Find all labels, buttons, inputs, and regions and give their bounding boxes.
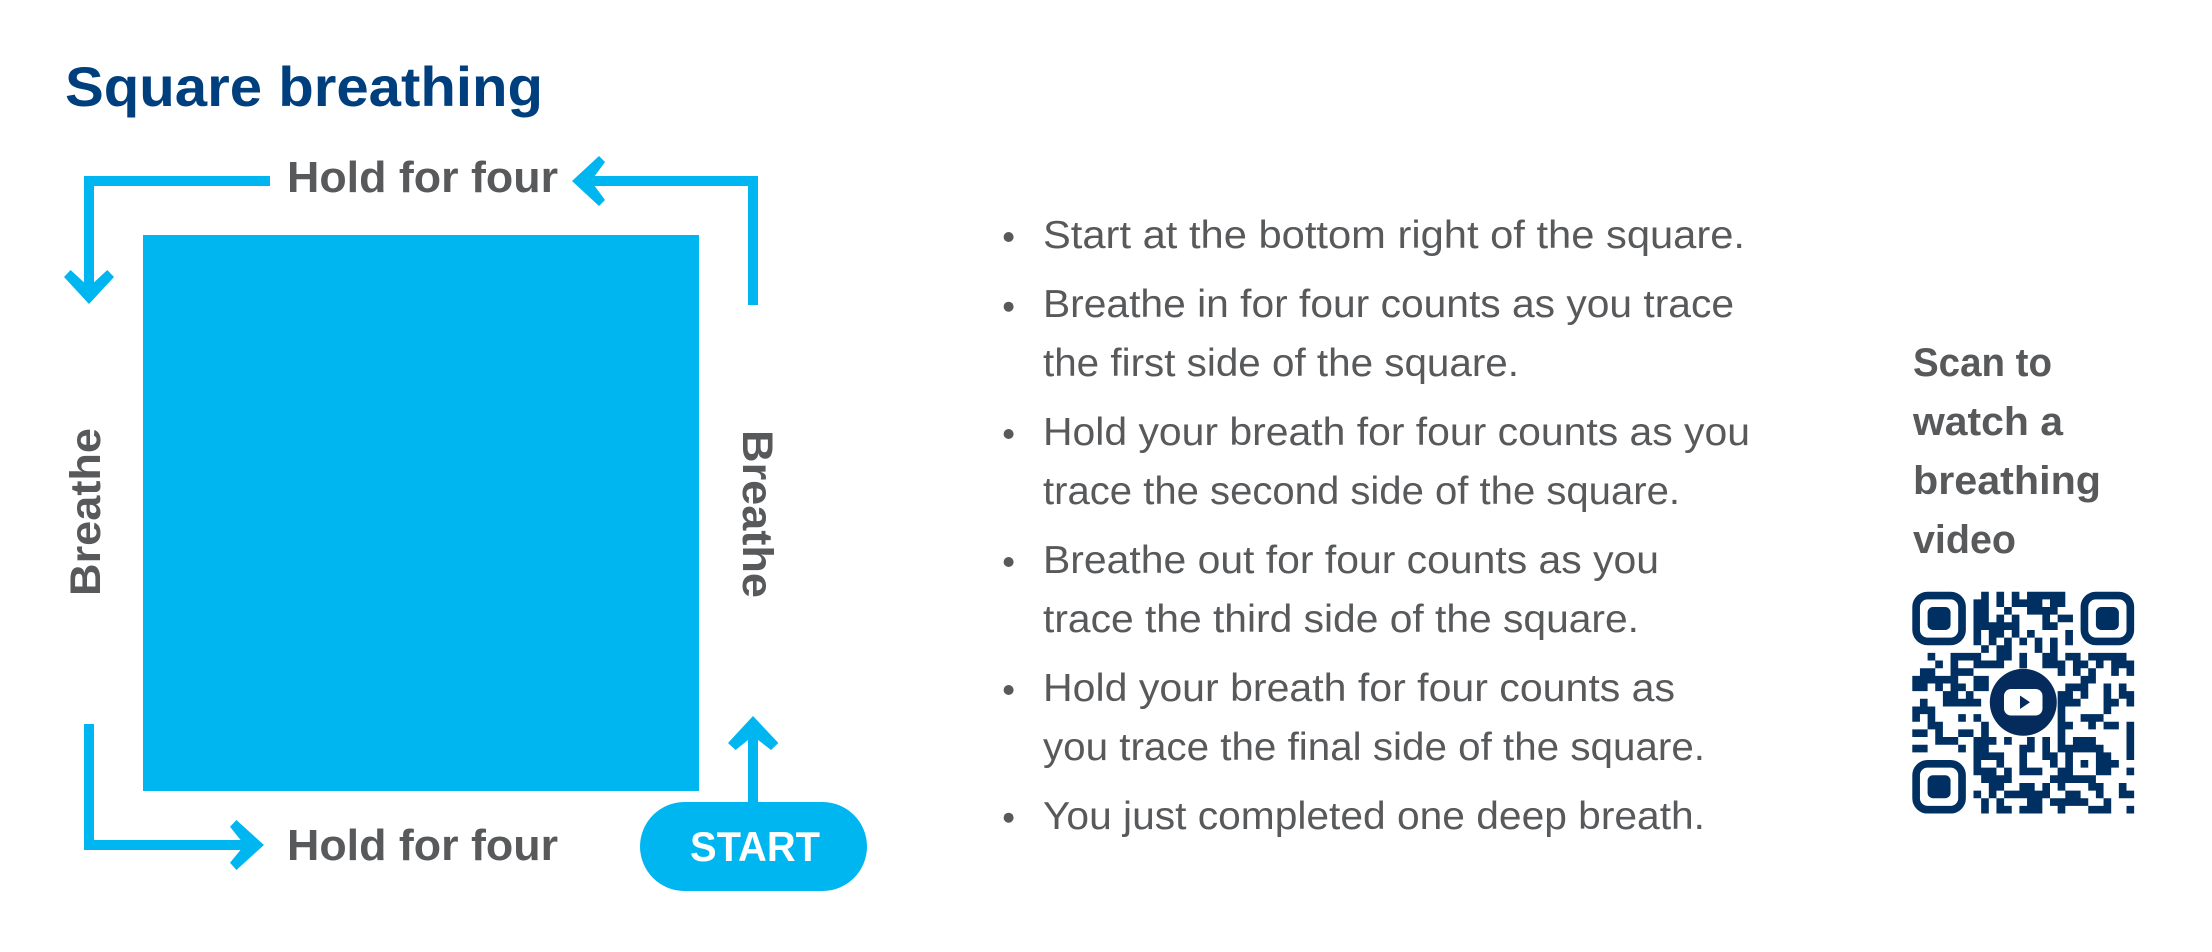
instructions list: You just completed one deep breath. xyxy=(1043,795,1705,838)
arrow: bottom left, pointing right xyxy=(84,724,264,870)
scan caption: breathing xyxy=(1913,459,2101,503)
QR code xyxy=(1912,592,2134,814)
instructions list: Hold your breath for four counts as xyxy=(1043,667,1675,710)
start button: START xyxy=(690,823,820,870)
arrow: bottom right, pointing up xyxy=(728,716,778,810)
instructions list xyxy=(1004,214,1750,838)
icon: video play badge xyxy=(1990,669,2057,736)
scan caption xyxy=(1912,341,2101,562)
instructions list: you trace the final side of the square. xyxy=(1043,726,1705,769)
label: hold for four, top: Hold for four xyxy=(287,153,558,202)
start button xyxy=(640,802,867,891)
instructions list: the first side of the square. xyxy=(1043,342,1519,385)
panel: blue square xyxy=(143,235,699,791)
arrow: top right, pointing left xyxy=(572,156,758,305)
scan caption: video xyxy=(1913,518,2016,562)
instructions list: trace the second side of the square. xyxy=(1043,470,1680,513)
instructions list: Start at the bottom right of the square. xyxy=(1043,214,1745,257)
scan caption: Scan to xyxy=(1913,341,2052,385)
scan caption: watch a xyxy=(1912,400,2064,444)
label: hold for four, bottom: Hold for four xyxy=(287,821,558,870)
label: breathe, right: Breathe xyxy=(733,430,781,598)
instructions list: trace the third side of the square. xyxy=(1043,598,1639,641)
instructions list: Breathe out for four counts as you xyxy=(1043,539,1659,582)
title: Square breathing xyxy=(65,55,543,118)
instructions list: Breathe in for four counts as you trace xyxy=(1043,283,1734,326)
instructions list: Hold your breath for four counts as you xyxy=(1043,411,1750,454)
arrow: top left, pointing down xyxy=(64,176,270,304)
label: breathe, left: Breathe xyxy=(62,428,110,596)
